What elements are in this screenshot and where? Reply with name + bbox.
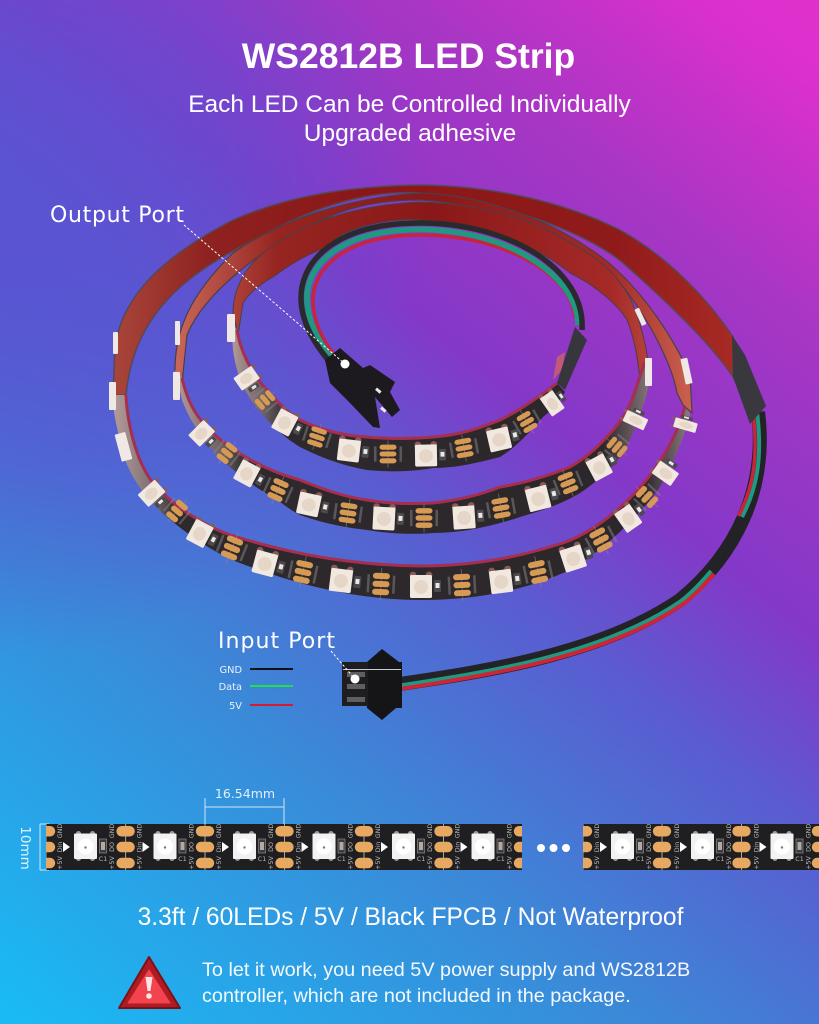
output port callout: [50, 203, 350, 368]
flat strip segment left: GND: [348, 824, 354, 838]
flat strip segment left: Din: [296, 842, 302, 852]
flat strip segment right: C1: [795, 856, 804, 863]
warning note: [202, 959, 690, 1007]
subtitle: [188, 91, 632, 147]
flat strip segment right: DO: [726, 842, 733, 852]
flat strip segment left: GND: [136, 824, 144, 838]
flat strip segment right: DO: [806, 842, 812, 852]
flat strip segment right: GND: [646, 824, 653, 838]
inner coil front face: [227, 314, 570, 471]
flat strip segment left: +5V: [136, 856, 144, 870]
middle coil front face: [173, 308, 652, 534]
flat strip segment left: GND: [57, 824, 64, 838]
output connector: [325, 348, 400, 428]
flat strip segment left: +5V: [506, 856, 514, 870]
flat strip segment left: +5V: [268, 856, 275, 870]
flat strip segment left: C1: [258, 856, 266, 863]
icon: warning triangle: [119, 957, 180, 1008]
flat strip segment left: DO: [506, 842, 514, 852]
flat strip segment left: GND: [454, 824, 462, 838]
flat strip segment left: GND: [188, 824, 196, 838]
flat strip segment left: DO: [109, 842, 116, 852]
LED spacing dimension: 16.54mm: [215, 786, 275, 801]
specifications line: 3.3ft / 60LEDs / 5V / Black FPCB / Not Waterproof: [138, 904, 684, 931]
flat strip segment right: GND: [754, 824, 760, 838]
middle coil red adhesive backing: [175, 193, 692, 413]
subtitle: Upgraded adhesive: [304, 120, 516, 147]
inner coil red adhesive backing: [233, 202, 650, 380]
strip width dimension: 10mm: [17, 826, 33, 870]
flat strip segment left: +5V: [454, 856, 462, 870]
flat strip segment right: Din: [754, 842, 760, 852]
LED spacing dimension: [205, 786, 284, 824]
warning note: controller, which are not included in the package.: [202, 985, 631, 1007]
flat strip segment left: C1: [417, 856, 425, 863]
outer coil red adhesive backing: [113, 185, 733, 395]
outer coil heat shrink: [732, 335, 766, 424]
continuation dots: [537, 844, 570, 852]
flat strip segment right: +5V: [594, 856, 601, 870]
warning note: To let it work, you need 5V power supply and WS2812B: [202, 959, 690, 981]
flat strip segment right: DO: [646, 842, 653, 852]
wire colour legend: Data: [219, 682, 242, 693]
flat strip segment right: Din: [674, 842, 681, 852]
flat strip segment right: +5V: [726, 856, 733, 870]
flat strip segment left: Din: [216, 842, 223, 852]
flat strip segment left: +5V: [296, 856, 302, 870]
flat strip segment left: Din: [454, 842, 462, 852]
flat strip segment left: Din: [136, 842, 144, 852]
flat strip segment right: +5V: [754, 856, 760, 870]
flat strip segment left: +5V: [427, 856, 434, 870]
input port callout: [218, 629, 360, 684]
flat strip segment right: +5V: [646, 856, 653, 870]
flat strip segment left: GND: [268, 824, 275, 838]
output cable loop: [301, 223, 582, 362]
subtitle: Each LED Can be Controlled Individually: [188, 91, 632, 118]
flat strip segment left: +5V: [216, 856, 223, 870]
flat strip segment right: GND: [726, 824, 733, 838]
strip width dimension: [17, 824, 49, 870]
flat strip segment left: C1: [337, 856, 346, 863]
flat strip segment right: Din: [594, 842, 601, 852]
inner coil heat shrink: [553, 327, 587, 390]
flat strip segment right: +5V: [806, 856, 812, 870]
wire colour legend: [219, 665, 293, 712]
flat strip segment left: C1: [99, 856, 107, 863]
flat strip segment left: DO: [268, 842, 275, 852]
title: WS2812B LED Strip: [242, 36, 575, 76]
flat strip segment right: [574, 824, 819, 870]
flat strip segment left: DO: [348, 842, 354, 852]
flat strip segment left: GND: [216, 824, 223, 838]
flat strip segment left: [37, 824, 532, 870]
flat strip segment left: Din: [375, 842, 382, 852]
flat strip segment left: +5V: [348, 856, 354, 870]
flat strip segment left: DO: [188, 842, 196, 852]
flat strip segment right: GND: [806, 824, 812, 838]
flat strip segment right: GND: [674, 824, 681, 838]
flat strip segment left: GND: [506, 824, 514, 838]
outer coil front face: [109, 332, 699, 602]
flat strip segment left: GND: [109, 824, 116, 838]
coiled LED strip photo illustration: [109, 185, 766, 720]
flat strip segment left: +5V: [188, 856, 196, 870]
flat strip segment left: C1: [496, 856, 505, 863]
flat strip segment left: C1: [178, 856, 187, 863]
output port callout: Output Port: [50, 203, 184, 228]
flat strip segment left: +5V: [57, 856, 64, 870]
flat strip segment right: +5V: [674, 856, 681, 870]
flat strip segment left: GND: [296, 824, 302, 838]
flat strip segment left: DO: [427, 842, 434, 852]
input port callout: Input Port: [218, 629, 335, 654]
wire colour legend: 5V: [229, 701, 242, 712]
flat strip segment right: C1: [716, 856, 724, 863]
flat strip segment left: GND: [427, 824, 434, 838]
flat strip segment left: +5V: [375, 856, 382, 870]
flat strip segment left: +5V: [109, 856, 116, 870]
input connector: [342, 649, 402, 720]
flat strip segment right: GND: [594, 824, 601, 838]
flat strip segment left: Din: [57, 842, 64, 852]
wire colour legend: GND: [220, 665, 242, 676]
flat strip segment right: C1: [636, 856, 644, 863]
flat strip segment left: GND: [375, 824, 382, 838]
input cable: [400, 412, 760, 689]
